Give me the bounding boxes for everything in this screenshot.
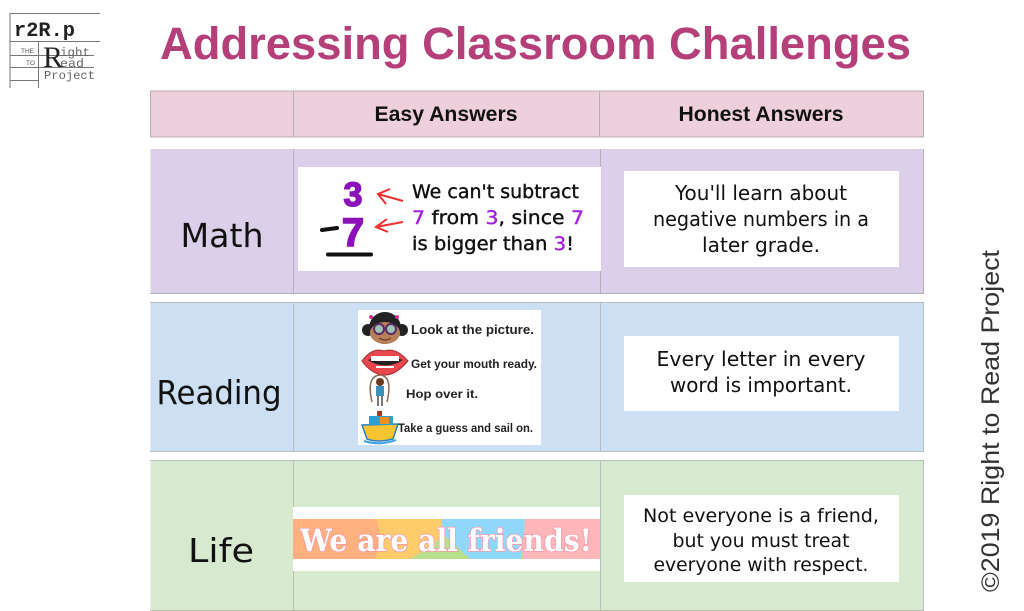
logo: r2R.p Right to Read Project: Project	[44, 69, 95, 83]
text block: Life honest answer	[624, 495, 899, 582]
text block: Reading honest answer: word is important.	[670, 373, 852, 397]
image: subtraction explanation: 7 from 3, since 7	[412, 207, 584, 229]
image: subtraction explanation	[298, 167, 601, 271]
icon: girl with glasses	[362, 312, 408, 344]
image: We are all friends banner	[293, 507, 600, 571]
icon: child jumping rope	[370, 375, 389, 406]
image: reading strategy list: Get your mouth ready.	[411, 359, 537, 371]
text block: Life honest answer: Not everyone is a friend,	[643, 505, 879, 527]
title: Addressing Classroom Challenges	[160, 18, 911, 69]
text block: Math honest answer: later grade.	[702, 233, 820, 257]
logo: r2R.p Right to Read Project: r2R.p	[14, 20, 75, 43]
label: Reading: Reading	[156, 373, 282, 412]
icon: open mouth	[362, 350, 408, 375]
heading: Easy Answers: Easy Answers	[374, 102, 518, 126]
image: We are all friends banner: We are all friends!	[299, 523, 592, 559]
panel: table header row	[150, 91, 924, 137]
image: subtraction explanation: is bigger than 3!	[412, 233, 574, 255]
image: reading strategy list: Hop over it.	[406, 387, 478, 401]
panel: Life row	[150, 460, 924, 610]
label: Math: Math	[180, 216, 264, 255]
text block: Life honest answer: but you must treat	[672, 530, 850, 552]
text block: Math honest answer: You'll learn about	[674, 181, 847, 205]
heading: Honest Answers: Honest Answers	[678, 102, 844, 126]
text block: Math honest answer	[624, 171, 899, 267]
panel: Reading row	[150, 302, 924, 452]
image: subtraction explanation: 7	[342, 211, 364, 255]
image: reading strategy list: Look at the picture.	[411, 323, 534, 337]
image: reading strategy list: Take a guess and sail on.	[398, 423, 533, 435]
logo: r2R.p Right to Read Project: TO	[26, 60, 35, 67]
image: subtraction explanation: 3	[344, 176, 362, 214]
text block: Life honest answer: everyone with respect.	[654, 554, 868, 576]
text block: Reading honest answer: Every letter in every	[656, 347, 866, 371]
text block: Reading honest answer	[624, 336, 899, 411]
logo: r2R.p Right to Read Project: R	[43, 41, 63, 74]
label: Life: Life	[188, 531, 254, 570]
image: subtraction explanation: We can't subtract	[412, 181, 579, 203]
logo: r2R.p Right to Read Project: ead	[60, 57, 84, 71]
logo: r2R.p Right to Read Project	[10, 13, 100, 88]
panel: Math row	[150, 149, 924, 294]
text block: Math honest answer: negative numbers in a	[653, 207, 869, 231]
copyright notice: ©2019 Right to Read Project	[977, 250, 1005, 592]
logo: r2R.p Right to Read Project: THE	[21, 48, 35, 55]
icon: boat	[362, 411, 398, 443]
logo: r2R.p Right to Read Project: ight	[60, 46, 90, 60]
image: reading strategy list	[358, 310, 541, 445]
icon: red arrows	[376, 189, 403, 232]
